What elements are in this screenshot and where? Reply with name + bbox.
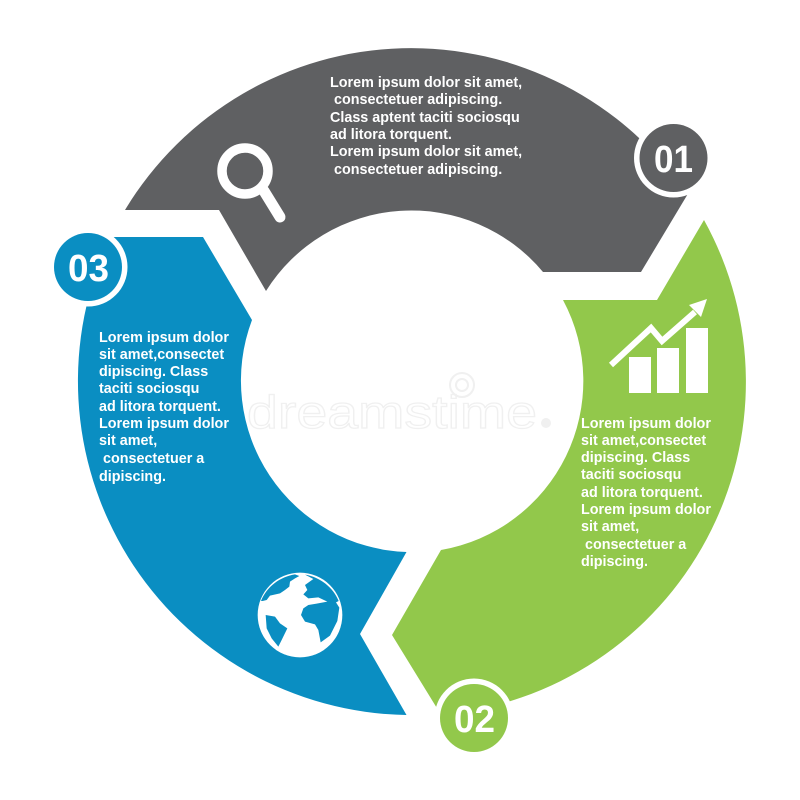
watermark bbox=[247, 373, 551, 438]
watermark: dreamstime bbox=[247, 386, 537, 438]
text block: step 2: taciti sociosqu bbox=[581, 467, 681, 483]
badge: 02 bbox=[434, 678, 514, 758]
text block: step 3: Lorem ipsum dolor bbox=[99, 330, 229, 346]
segment shape: green bbox=[392, 220, 746, 715]
text block: step 2: sit amet, bbox=[581, 519, 639, 535]
text block: step 3: sit amet, bbox=[99, 433, 157, 449]
text block: step 3: dipiscing. Class bbox=[99, 364, 208, 380]
icon: globe bbox=[258, 573, 342, 657]
text block: step 2: sit amet,consectet bbox=[581, 433, 706, 449]
panel: step 1 gray segment bbox=[125, 48, 713, 291]
segment shape: blue bbox=[78, 237, 406, 715]
text block: step 2: dipiscing. bbox=[581, 554, 648, 570]
text block: step 3: sit amet,consectet bbox=[99, 347, 224, 363]
text block: step 3: taciti sociosqu bbox=[99, 381, 199, 397]
badge: 03 bbox=[48, 228, 128, 306]
text block: step 1: ad litora torquent. bbox=[330, 127, 452, 143]
text block: step 2: ad litora torquent. bbox=[581, 485, 703, 501]
panel: step 3 blue segment bbox=[48, 228, 406, 715]
text block: step 3: consectetuer a bbox=[103, 451, 205, 467]
text block: step 3: dipiscing. bbox=[99, 469, 166, 485]
text block: step 1: Lorem ipsum dolor sit amet, bbox=[330, 144, 522, 160]
text block: step 3: Lorem ipsum dolor bbox=[99, 416, 229, 432]
text block: step 1: Lorem ipsum dolor sit amet, bbox=[330, 75, 522, 91]
badge: 02: 02 bbox=[454, 699, 495, 741]
text block: step 1: Class aptent taciti sociosqu bbox=[330, 110, 520, 126]
badge: 03: 03 bbox=[68, 248, 109, 290]
segment shape: gray bbox=[125, 48, 688, 291]
panel: step 2 green segment bbox=[392, 220, 746, 758]
badge: 01 bbox=[634, 118, 713, 198]
badge: 01: 01 bbox=[654, 139, 693, 181]
text block: step 2: consectetuer a bbox=[585, 537, 687, 553]
text block: step 1: consectetuer adipiscing. bbox=[334, 162, 502, 178]
text block: step 1: consectetuer adipiscing. bbox=[334, 92, 502, 108]
icon: magnifying glass bbox=[222, 148, 280, 217]
icon: rising bar chart bbox=[611, 299, 708, 393]
text block: step 2: Lorem ipsum dolor bbox=[581, 502, 711, 518]
text block: step 3: ad litora torquent. bbox=[99, 399, 221, 415]
text block: step 2: Lorem ipsum dolor bbox=[581, 416, 711, 432]
text block: step 2: dipiscing. Class bbox=[581, 450, 690, 466]
